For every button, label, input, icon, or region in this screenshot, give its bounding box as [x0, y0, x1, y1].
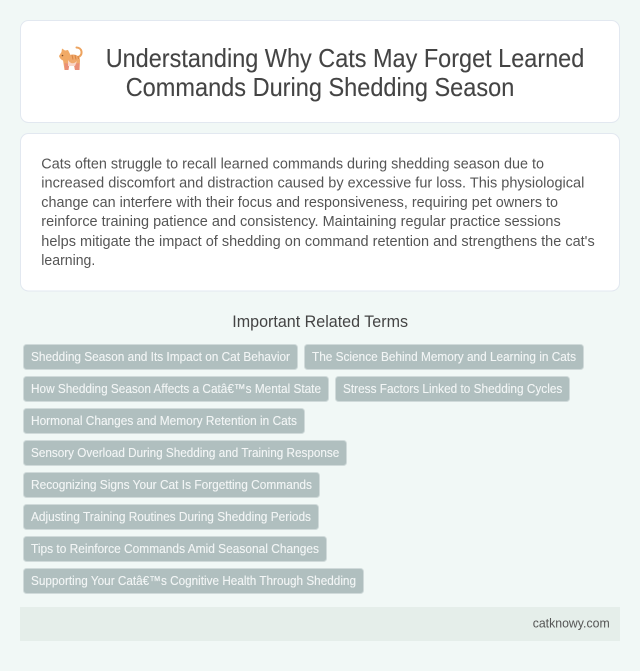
tag: cognitive health: [24, 568, 364, 594]
tag: adjusting routines: [24, 504, 318, 530]
tag: adjusting routines: Adjusting Training Routines During Shedding Periods: [31, 509, 311, 524]
title: [106, 45, 584, 102]
tag: reinforcement tips: [24, 536, 326, 562]
footer: site name: catknowy.com: [533, 616, 610, 631]
panel: description card: [20, 134, 620, 291]
tag: hormonal changes: [24, 408, 304, 434]
tag: sensory overload: [24, 440, 346, 466]
tag: shedding season impact: [24, 344, 298, 370]
text block: description: Cats often struggle to recall learned commands during shedding season due to: [41, 156, 544, 172]
footer bar: [20, 607, 620, 641]
tag: science of memory: [304, 344, 584, 370]
tag: science of memory: The Science Behind Memory and Learning in Cats: [312, 349, 576, 364]
text block: description: helps mitigate the impact of shedding on command retention and strengthens the cat's: [41, 234, 595, 250]
heading: related terms: Important Related Terms: [232, 313, 408, 331]
tag: stress factors: Stress Factors Linked to Shedding Cycles: [343, 381, 562, 396]
panel: related term tags: [24, 344, 584, 594]
tag: hormonal changes: Hormonal Changes and Memory Retention in Cats: [31, 413, 297, 428]
text block: description: learning.: [41, 253, 95, 269]
tag: stress factors: [336, 376, 570, 402]
tag: mental state: [24, 376, 328, 402]
title: Commands During Shedding Season: [126, 74, 514, 102]
tag: recognizing signs: [24, 472, 320, 498]
text block: description: increased discomfort and distraction caused by excessive fur loss. This physiological: [41, 176, 584, 192]
icon: cat: [59, 48, 82, 70]
tag: cognitive health: Supporting Your Catâ€™s Cognitive Health Through Shedding: [31, 573, 356, 588]
title: Understanding Why Cats May Forget Learned: [106, 45, 584, 73]
tag: shedding season impact: Shedding Season and Its Impact on Cat Behavior: [31, 349, 291, 364]
text block: description: reinforce training patience and consistency. Maintaining regular practice sessions: [41, 214, 561, 230]
tag: recognizing signs: Recognizing Signs Your Cat Is Forgetting Commands: [31, 477, 312, 492]
tag: sensory overload: Sensory Overload During Shedding and Training Response: [31, 445, 339, 460]
tag: mental state: How Shedding Season Affects a Catâ€™s Mental State: [31, 381, 321, 396]
text block: description: [41, 156, 595, 269]
tag: reinforcement tips: Tips to Reinforce Commands Amid Seasonal Changes: [31, 541, 319, 556]
panel: title card: [20, 20, 620, 122]
text block: description: change can interfere with their focus and responsiveness, requiring pet owners to: [41, 195, 558, 211]
